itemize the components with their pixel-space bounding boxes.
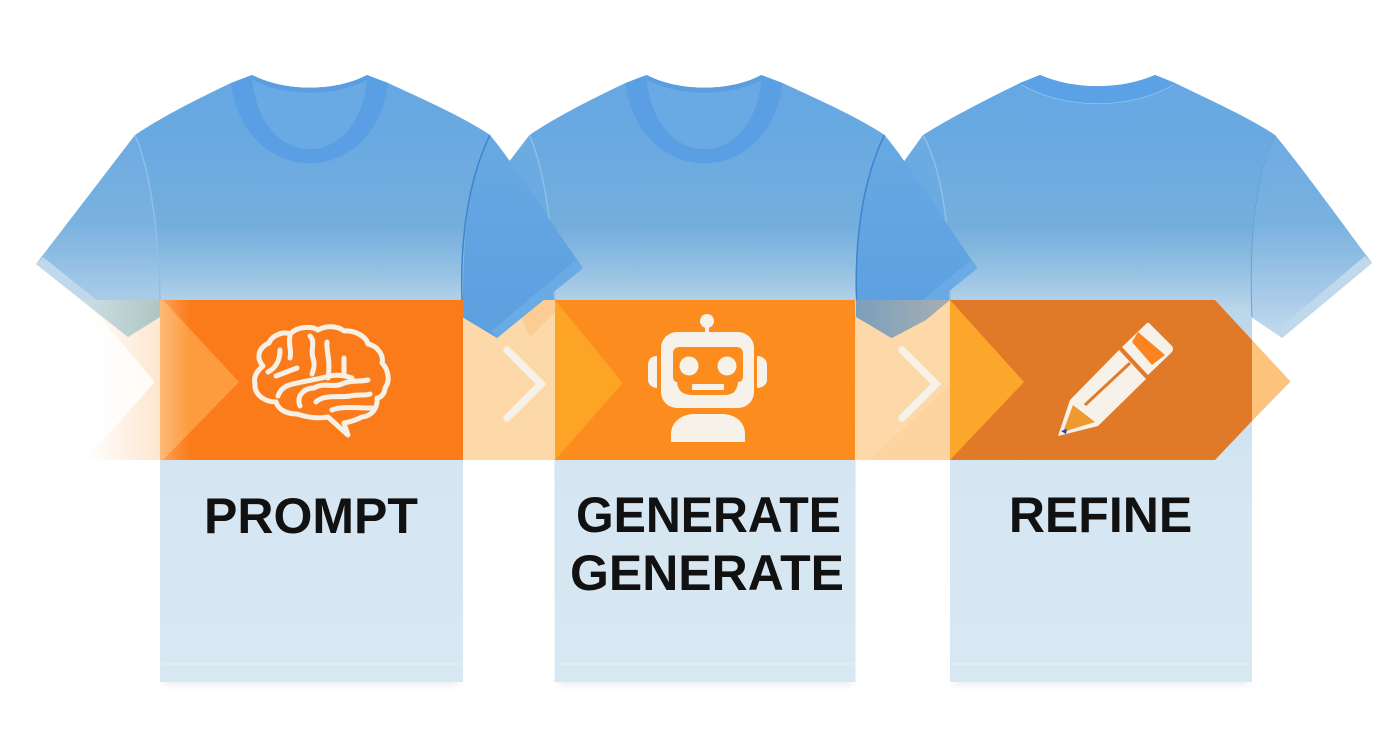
label: refine: REFINE — [1009, 487, 1192, 543]
connector band: prompt to generate — [461, 300, 555, 460]
sleeve tint: prompt shirt left sleeve — [81, 300, 160, 337]
panel: generate band — [555, 300, 855, 460]
sleeve tint: generate shirt right sleeve — [856, 300, 950, 338]
left fade arrow — [85, 300, 160, 460]
icon: brain — [255, 327, 388, 435]
label: generate line two: GENERATE — [570, 545, 844, 601]
panel: prompt band — [160, 300, 463, 460]
label: prompt: PROMPT — [204, 488, 418, 544]
panel: refine band with arrow tip — [950, 300, 1290, 460]
label: generate line one: GENERATE — [576, 487, 841, 543]
shirt: generate (front view) — [430, 75, 978, 684]
icon: robot — [648, 314, 767, 442]
shirt: refine (back view) — [840, 75, 1372, 684]
icon: pencil — [1058, 323, 1173, 436]
connector band: generate to refine — [855, 300, 951, 460]
shirt: prompt (front view) — [36, 75, 583, 684]
arrow chevron: generate to refine — [902, 350, 936, 418]
arrow chevron: prompt to generate — [507, 350, 541, 418]
